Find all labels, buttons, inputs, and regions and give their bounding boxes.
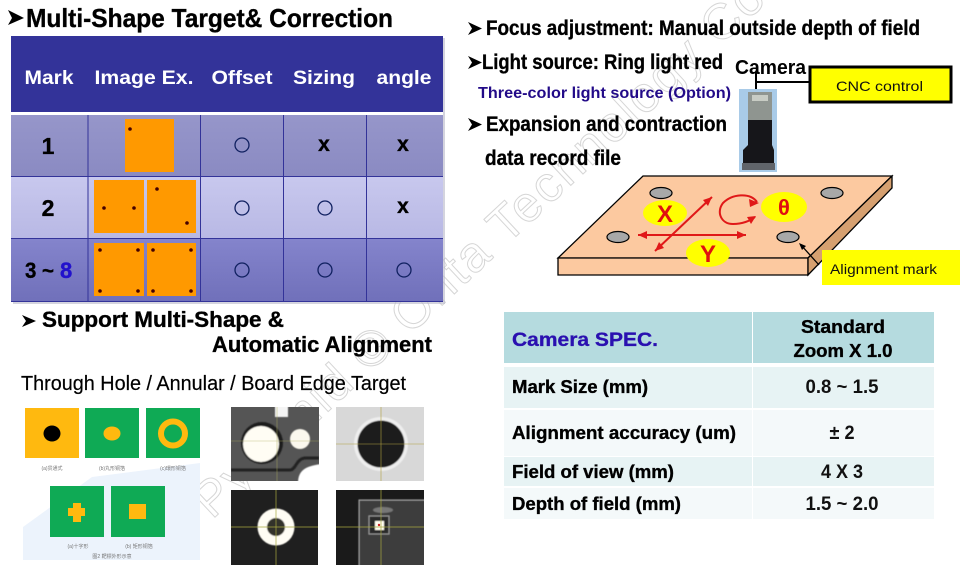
table row 2: 2 [42,195,54,221]
table header row: Image Ex. [94,68,194,89]
figure: target shapes: (a)贯通式 [41,465,63,472]
feature list: focus, light source, data record: data record file [485,147,621,170]
figure: target shapes: (c)環形铜箔 [160,465,186,472]
camera label: Camera [735,57,807,79]
feature list: focus, light source, data record: Focus adjustment: Manual outside depth of field [486,17,920,40]
icon: camera [739,89,777,172]
X axis label: X [657,201,673,228]
board [558,176,892,275]
alignment mark callout [799,243,960,285]
table header row: angle [376,68,432,89]
alignment mark holes [607,188,843,242]
panel: camera spec table [504,312,934,519]
figure: target shapes: (b) 矩形铜箔 [125,543,153,550]
feature list: focus, light source, data record [468,17,920,170]
table row 1 [11,115,443,177]
spec row: depth of field: 1.5 ~ 2.0 [806,494,878,515]
table row 3: 3 ~ [25,258,54,283]
spec row: depth of field [504,488,934,519]
spec row: depth of field: Depth of field (mm) [512,494,681,514]
figure: target shapes [23,408,200,560]
spec row: alignment accuracy: Alignment accuracy (um) [512,423,736,443]
spec row: alignment accuracy [504,410,934,456]
heading: support multi-shape and automatic alignment [22,307,433,357]
spec row: field of view: Field of view (mm) [512,462,674,482]
table row 2: x [397,195,409,218]
theta label: θ [778,195,790,220]
spec row: mark size: Mark Size (mm) [512,377,648,397]
table header row: Offset [212,68,273,89]
spec row: mark size: 0.8 ~ 1.5 [806,377,879,398]
spec header row: Camera SPEC. [512,330,658,351]
figure: target shapes: 图2 靶標外形示意 [92,553,132,560]
red motion arrows [638,195,759,251]
table header row: Mark [24,68,74,89]
feature list: focus, light source, data record: Light source: Ring light red [482,51,723,74]
heading: support multi-shape and automatic alignment: Automatic Alignment [212,332,433,357]
subheading: target types: Through Hole / Annular / Board Edge Target [21,373,406,395]
spec row: field of view: 4 X 3 [821,462,863,483]
feature list: focus, light source, data record: Three-color light source (Option) [478,85,731,102]
X axis label [643,200,687,228]
spec header row: Standard [801,317,885,337]
table row 3: 8 [60,258,72,283]
photo: dark through hole [336,407,424,481]
feature list: focus, light source, data record: Expansion and contraction [486,113,727,136]
spec header row: Zoom X 1.0 [794,341,892,361]
photo: through hole with small target [231,405,321,483]
Y axis label: Y [700,241,716,268]
table header row: Sizing [293,68,355,89]
spec row: field of view [504,457,934,486]
theta label [761,192,807,222]
spec header row [504,312,934,363]
figure: target shapes: (b)丸形铜箔 [99,465,125,472]
CNC control box: CNC control [836,78,923,94]
spec row: alignment accuracy: ± 2 [830,423,854,444]
CNC control box [810,67,951,102]
diagram: camera alignment over board [558,57,960,285]
table row 1: x [318,133,330,156]
table row 1: x [397,133,409,156]
Y axis label [686,239,730,268]
table row 1: 1 [42,133,55,159]
spec row: mark size [504,367,934,408]
table header row [11,36,443,112]
alignment mark callout: Alignment mark [830,261,938,277]
photo: annular target [231,490,318,565]
photo: board edge target [336,490,424,565]
table row 2 [11,177,443,239]
figure: target shapes: (a)十字形 [67,543,89,550]
panel: mark correction table [11,36,445,304]
table row 3 [11,239,443,302]
heading: support multi-shape and automatic alignment: Support Multi-Shape & [42,307,284,332]
title: multi-shape target and correction: Multi-Shape Target& Correction [26,3,393,33]
